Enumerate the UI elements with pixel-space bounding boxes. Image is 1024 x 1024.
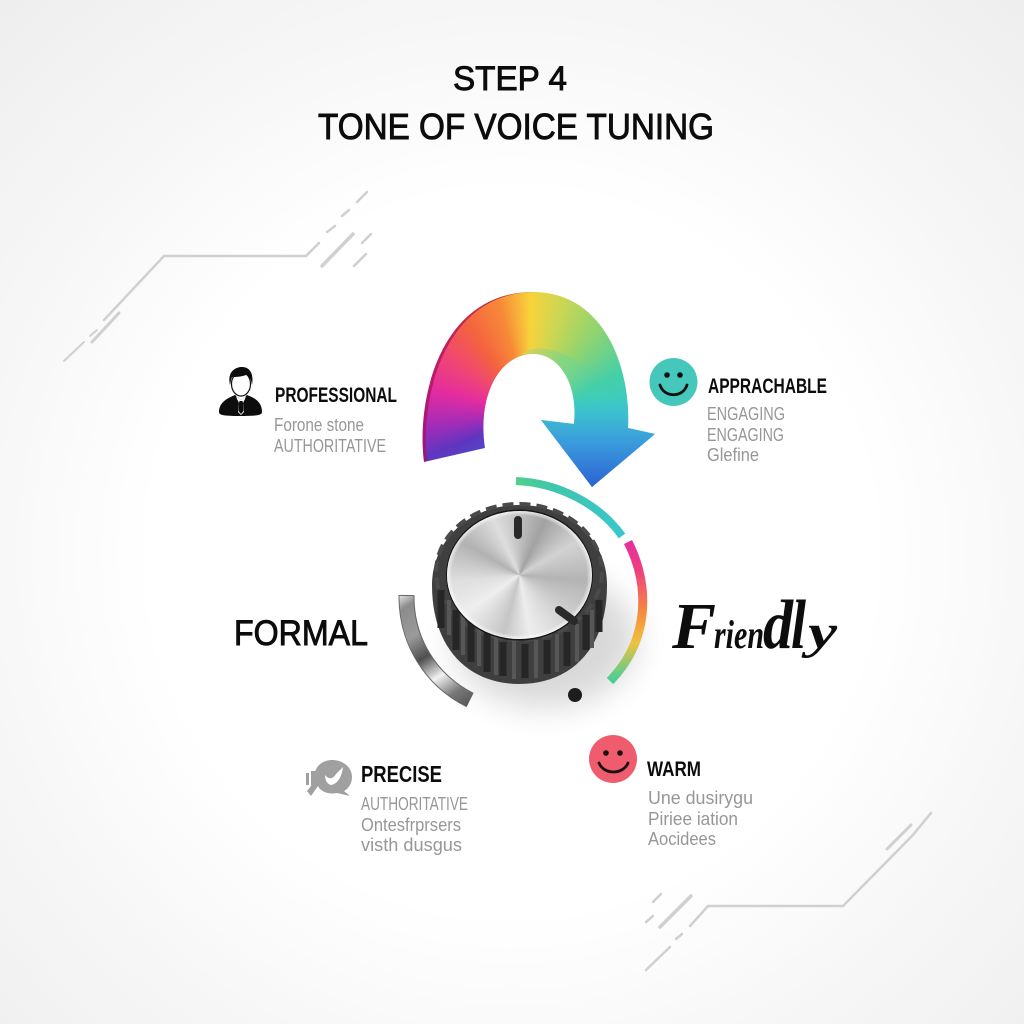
title: TONE OF VOICE TUNING xyxy=(318,106,714,147)
knob brushed metal face xyxy=(447,511,592,639)
title: STEP 4 xyxy=(453,60,567,98)
block: professional: AUTHORITATIVE xyxy=(274,436,386,456)
label: Friendly: rien xyxy=(714,612,764,657)
block: professional xyxy=(219,367,397,456)
indicator dot xyxy=(568,688,582,702)
title xyxy=(318,60,714,147)
block: precise: AUTHORITATIVE xyxy=(361,794,468,814)
block: approachable: ENGAGING xyxy=(707,425,784,445)
label: Friendly: F xyxy=(671,590,716,663)
icon: red smiley xyxy=(589,735,637,783)
icon: businessman xyxy=(219,367,262,416)
block: warm: WARM xyxy=(647,758,701,781)
knob shadow xyxy=(453,572,637,708)
block: approachable: APPRACHABLE xyxy=(708,375,827,398)
rainbow curved arrow xyxy=(422,292,655,487)
icon: teal smiley xyxy=(650,358,698,406)
block: warm: Piriee iation xyxy=(648,809,738,829)
arrow inner fold xyxy=(522,348,586,389)
block: warm: Aocidees xyxy=(648,829,716,849)
block: professional: PROFESSIONAL xyxy=(275,384,397,407)
block: approachable: Glefine xyxy=(707,445,759,465)
block: warm xyxy=(589,735,753,849)
decorative circuit line: bottom right xyxy=(646,813,931,970)
block: approachable xyxy=(650,358,827,465)
decorative circuit line: top left xyxy=(64,192,371,361)
icon: grey speech bubble xyxy=(306,760,352,796)
block: precise: Ontesfrprsers xyxy=(361,815,461,835)
scale arc: rainbow xyxy=(610,542,643,681)
block: warm: Une dusirygu xyxy=(648,788,753,808)
scale arc: silver xyxy=(406,595,470,700)
block: professional: Forone stone xyxy=(274,415,364,435)
label: Friendly: y xyxy=(801,606,838,659)
volume knob xyxy=(432,504,607,684)
block: approachable: ENGAGING xyxy=(707,404,785,424)
arrow outer dark edge xyxy=(423,292,533,462)
label: FORMAL: FORMAL xyxy=(234,614,368,653)
knob body xyxy=(432,505,607,684)
label: Friendly: l xyxy=(791,587,806,664)
arrow inner dark edge xyxy=(570,418,574,424)
scale arc: teal xyxy=(516,481,622,536)
block: precise xyxy=(306,760,468,855)
block: precise: PRECISE xyxy=(361,761,442,787)
block: precise: visth dusgus xyxy=(361,835,462,855)
label: Friendly: d xyxy=(763,587,794,664)
knob notches xyxy=(518,520,574,621)
knob ribs xyxy=(441,590,599,679)
